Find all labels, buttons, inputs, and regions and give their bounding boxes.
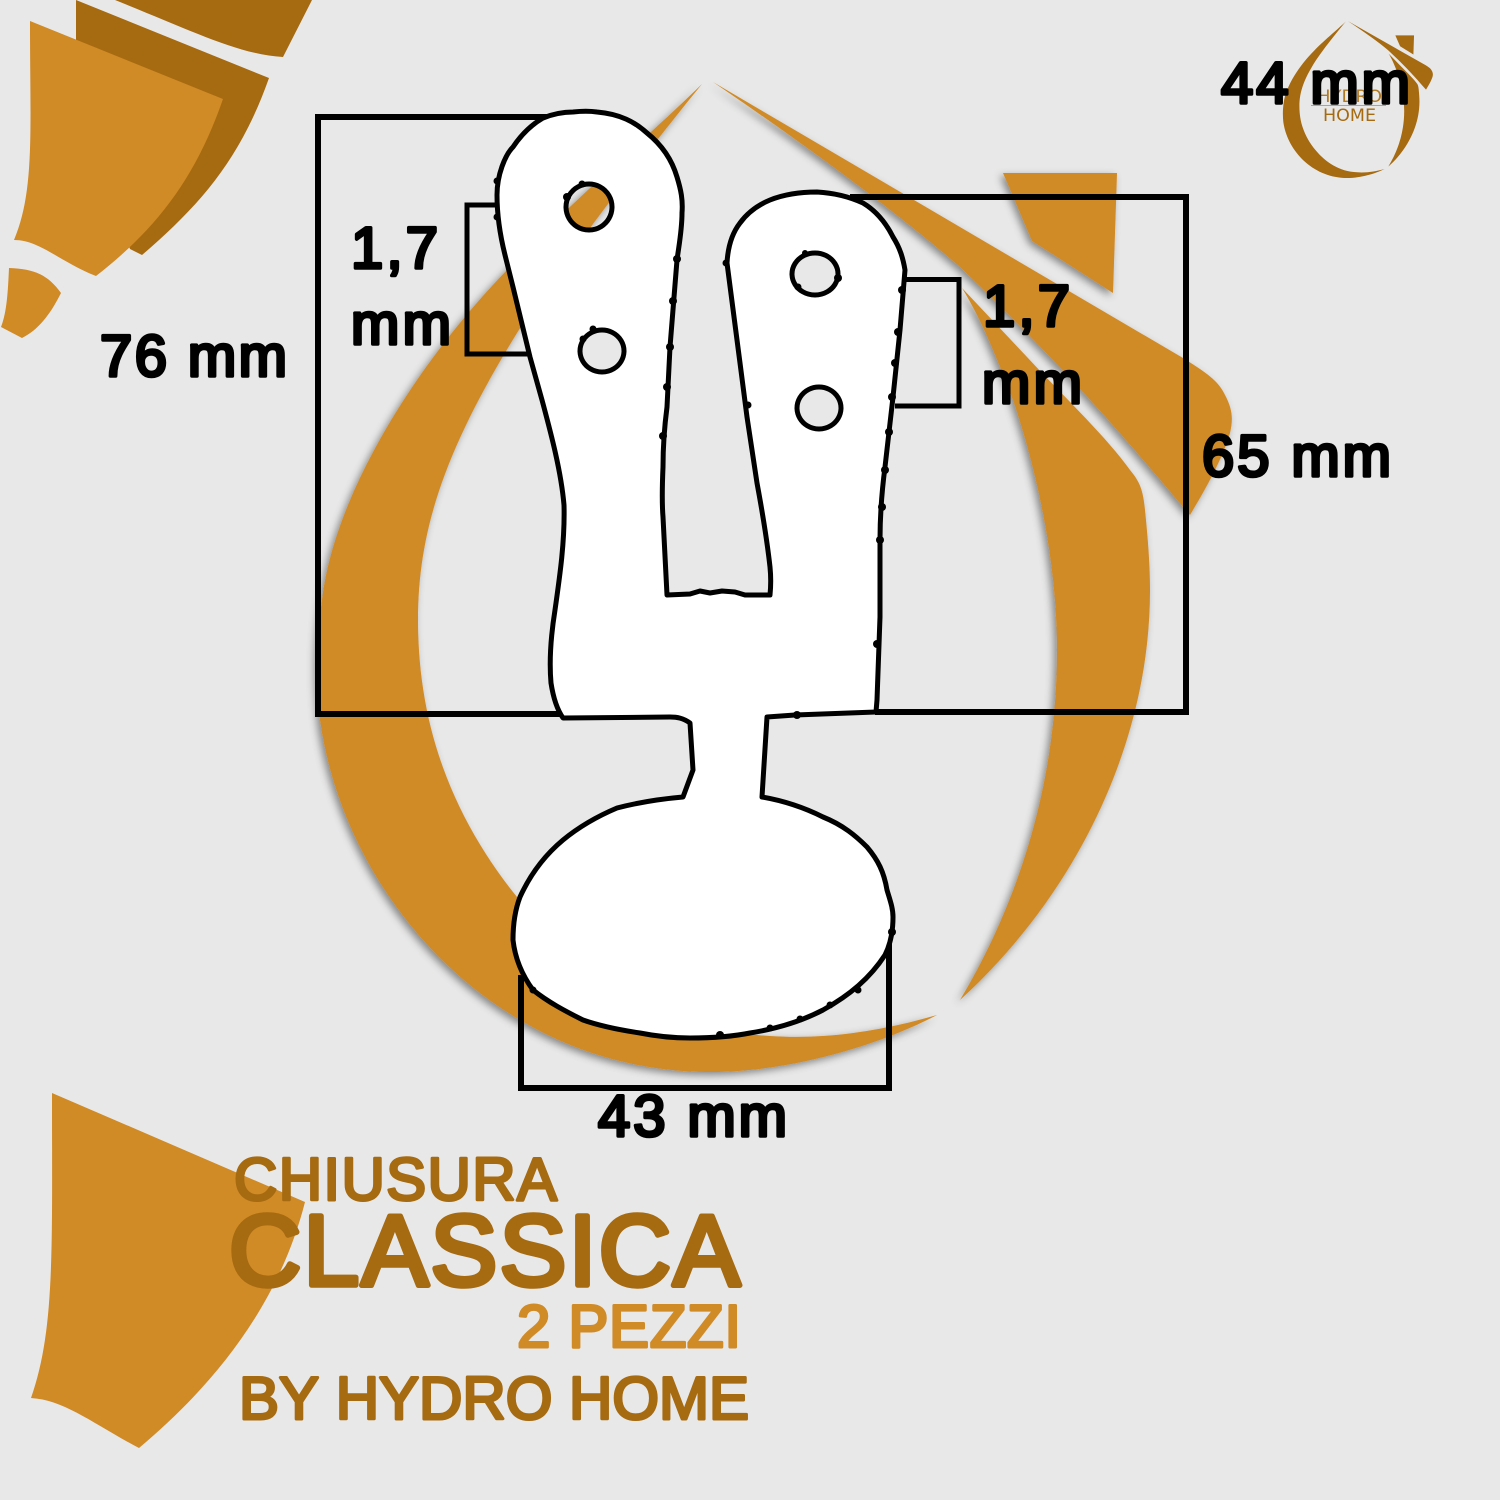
label: right 1,7 mm: 1,7	[983, 274, 1070, 339]
dimension bracket: right 1,7 mm	[895, 280, 959, 406]
title block: BY HYDRO HOME	[239, 1365, 749, 1432]
decorative shapes: top-left	[1, 0, 312, 338]
title block: 2 PEZZI	[517, 1293, 741, 1360]
label: left 1,7 mm: mm	[351, 292, 451, 357]
label: 44 mm: 44 mm	[1221, 51, 1410, 116]
dimension box: 76 mm height	[318, 117, 560, 714]
title block: CHIUSURA	[234, 1146, 557, 1213]
dimension bracket: left 1,7 mm	[467, 205, 528, 354]
small logo top-right	[1283, 21, 1433, 178]
label: 43 mm: 43 mm	[598, 1084, 787, 1149]
small logo top-right: HYDRO	[1317, 87, 1382, 107]
closure piece silhouette with holes	[494, 111, 906, 1039]
label: left 1,7 mm: 1,7	[351, 216, 438, 281]
label: right 1,7 mm	[982, 274, 1082, 416]
outline bumps	[494, 178, 906, 1039]
label: 65 mm: 65 mm	[1202, 424, 1391, 489]
large drop logo background	[317, 82, 1232, 1072]
title block: CLASSICA	[229, 1195, 740, 1307]
dimension box: 65 mm height	[850, 197, 1186, 712]
label: 76 mm: 76 mm	[100, 324, 287, 389]
small logo top-right: HOME	[1323, 106, 1376, 126]
title block	[229, 1146, 749, 1432]
label: left 1,7 mm	[351, 216, 451, 357]
dimension box: 43 mm width	[521, 940, 889, 1088]
label: right 1,7 mm: mm	[982, 351, 1082, 416]
decorative shape: bottom-left	[31, 1093, 305, 1448]
